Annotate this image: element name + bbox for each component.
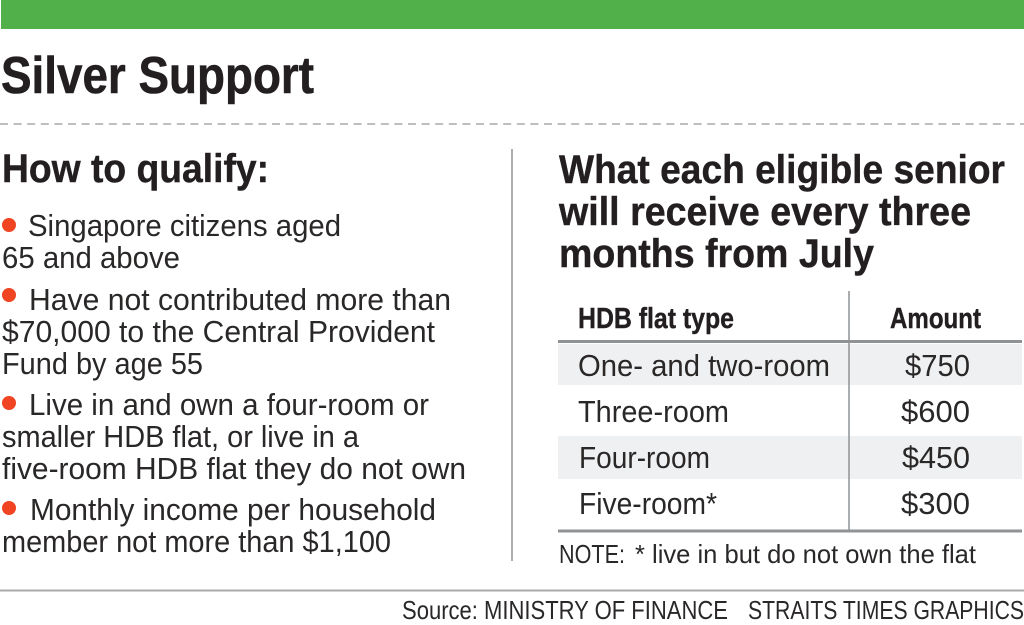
row: one- and two-room: [578, 348, 970, 383]
table note: * live in but do not own the flat: [635, 539, 977, 569]
row: one- and two-room: One- and two-room: [578, 348, 830, 383]
bullet: citizens aged 65 and above: Singapore citizens aged: [28, 208, 341, 243]
bullet: citizens aged 65 and above: [2, 208, 341, 275]
heading: how to qualify: How to qualify:: [2, 147, 269, 191]
bullet: monthly income limit: [2, 492, 436, 559]
row: five-room: [579, 486, 970, 521]
source line: Source: MINISTRY OF FINANCE: [402, 595, 728, 625]
green header band: [1, 0, 1024, 29]
bullet: CPF contribution limit: [2, 282, 451, 381]
row: three-room: [578, 394, 970, 429]
row: three-room: $600: [901, 394, 970, 429]
source line: [402, 595, 1024, 625]
heading: what each eligible senior will receive: will receive every three: [558, 190, 971, 234]
bullet: citizens aged 65 and above: 65 and above: [2, 240, 180, 275]
panel: what each senior receives: [558, 148, 1022, 569]
table header: Amount: [890, 303, 981, 335]
bullet: CPF contribution limit: Fund by age 55: [2, 346, 203, 381]
bullet: HDB flat ownership: five-room HDB flat they do not own: [2, 451, 466, 486]
table: amount by HDB flat type: [558, 291, 1022, 531]
table note: NOTE:: [559, 539, 625, 569]
bullet: CPF contribution limit: Have not contributed more than: [29, 282, 451, 317]
bullet: HDB flat ownership: smaller HDB flat, or live in a: [2, 419, 360, 454]
row: one- and two-room: $750: [905, 348, 970, 383]
bullet: monthly income limit: Monthly income per household: [30, 492, 436, 527]
table header: [578, 303, 981, 335]
bullet: CPF contribution limit: $70,000 to the Central Provident: [2, 314, 435, 349]
panel: how to qualify: [2, 147, 466, 559]
row: three-room: Three-room: [578, 394, 729, 429]
row: four-room: Four-room: [579, 440, 710, 475]
heading: what each eligible senior will receive: [558, 148, 1005, 276]
row: five-room: Five-room*: [579, 486, 717, 521]
row: four-room: [579, 440, 970, 475]
table header: HDB flat type: [578, 303, 734, 335]
bullet: HDB flat ownership: Live in and own a four-room or: [29, 387, 429, 422]
row: four-room: $450: [902, 440, 970, 475]
title: Silver Support: [1, 47, 314, 105]
bullet: HDB flat ownership: [2, 387, 466, 486]
bullet: monthly income limit: member not more than $1,100: [2, 524, 391, 559]
heading: what each eligible senior will receive: months from July: [559, 232, 875, 276]
row: five-room: $300: [901, 486, 970, 521]
